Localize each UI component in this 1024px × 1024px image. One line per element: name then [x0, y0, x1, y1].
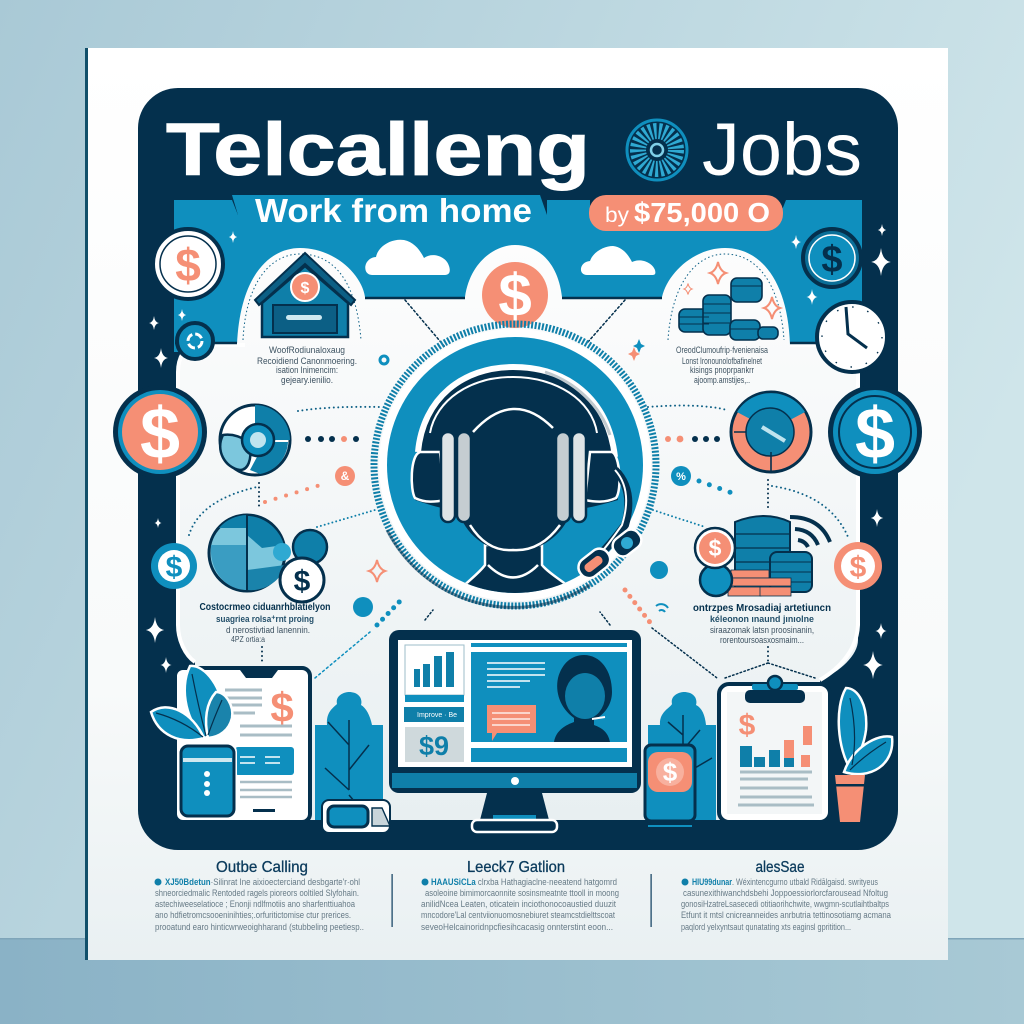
icon: coin stack with wifi: $ [709, 535, 722, 561]
phone right [645, 745, 695, 826]
column two: seveoHelcainoridnpcfiesihcacasig onnterstint eoon... [421, 922, 613, 932]
text: collage block: Costocrmeo ciduanrhblatielyon [200, 602, 330, 613]
icon: clock [817, 302, 887, 372]
icon: coin lower left [151, 543, 197, 589]
ear cups [441, 432, 586, 522]
column two [421, 859, 619, 932]
monitor price: $9 [419, 731, 449, 761]
column three: casunexithiwanchdsbehi Joppoessiorlorcfarousead Nfoltug [683, 888, 888, 898]
plant left [151, 666, 232, 740]
text: home block: Recoidiend Canonmoering. [257, 356, 357, 366]
column one [154, 859, 364, 932]
salary pill: by [605, 204, 630, 227]
paper sheet [85, 48, 948, 960]
clouds [365, 240, 655, 275]
tree left [315, 692, 383, 820]
clipboard [719, 676, 830, 822]
icon: coin lower left: $ [166, 551, 183, 584]
text: stack block: ontrzpes Mrosadiaj artetiuncn [693, 603, 831, 614]
icon: coin top left: $ [175, 239, 201, 291]
central headset agent [374, 324, 656, 607]
tablet [175, 668, 310, 822]
monitor speech bubble [487, 705, 536, 741]
monitor price [405, 727, 464, 762]
text: collage block [200, 602, 330, 644]
column dividers [392, 874, 652, 927]
column three: Etfunt it mtsl cnicreanneides anrbutria tettinosotiamg acmana [681, 910, 891, 920]
column three [681, 859, 891, 932]
column two heading: Leeck7 Gatlion [467, 859, 565, 876]
center dollar bubble: $ [498, 262, 532, 329]
icon: big coin left [113, 385, 207, 479]
monitor tag [404, 707, 464, 722]
icon: photo collage left [209, 515, 327, 602]
salary pill [589, 195, 783, 231]
title: Telcalleng [166, 108, 590, 191]
text: home block: isation Inimencim: [276, 365, 338, 375]
text: home block: gejeary.ienilio. [281, 375, 333, 385]
icon: photo collage left: $ [294, 565, 311, 598]
icon: big coin right: $ [855, 394, 895, 474]
headset band and head [415, 368, 618, 552]
salary pill: $75,000 O [634, 197, 770, 228]
monitor [389, 630, 641, 832]
icon: coin top right [803, 229, 861, 287]
plant right [839, 688, 892, 774]
blue band [174, 200, 862, 352]
flower pot [835, 775, 865, 822]
phone left [178, 743, 237, 819]
column one: XJ50Bdetun·Silinrat Ine aixioecterciand desbgarte'r·ohl [165, 877, 360, 887]
small icons around center: & [341, 469, 350, 483]
monitor agent [554, 655, 612, 742]
column one: prooatund earo hinticwrweoighharand (stubbeling peetiesp.. [155, 922, 364, 932]
icon: title wheel [627, 120, 687, 180]
small device [322, 800, 390, 833]
icon: coin stacks [679, 262, 780, 340]
column three: gonosiHzatreLsasecedi otitiaorihchwite, wwgmn-scutlaihtbaltps [681, 899, 889, 909]
dotted connectors [189, 300, 848, 678]
text: home block [257, 345, 357, 385]
subtitle ribbon: Work from home [255, 192, 532, 229]
icon: big coin left: $ [140, 394, 180, 474]
column one: shneorciedmalic Rentoded ragels pioreors ooltiled Slyfohain. [155, 888, 359, 898]
column three: HIU99dunar. Wéxintencgurno utbald Ridālgaisd. swrityeus [692, 877, 878, 887]
monitor chart [405, 645, 464, 702]
icon: house [255, 253, 355, 337]
column three heading: alesSae [756, 859, 805, 876]
text: coins block [676, 345, 768, 385]
left ear lobe [412, 452, 445, 502]
clipboard: $ [739, 709, 756, 742]
icon: coin lower right [834, 542, 882, 590]
small icons around center: % [676, 471, 686, 483]
center dollar bubble [482, 262, 548, 329]
icon: pie right [731, 392, 811, 472]
dark main panel [138, 88, 898, 850]
column two: anilidNcea Leaten, oticatein inciothonocoaustied duuzit [421, 899, 616, 909]
icon: coin lower right: $ [850, 551, 867, 584]
icon: house: $ [301, 280, 310, 297]
small icons around center [305, 339, 720, 617]
text: coins block: OreodClumoufrip·fvenienaisa [676, 345, 768, 355]
text: coins block: kisings pnoprpankrr [690, 365, 754, 375]
tablet: $ [270, 684, 294, 731]
title [166, 108, 862, 191]
title: Jobs [702, 108, 862, 191]
text: stack block: siraazomak latsn proosinanin, [710, 625, 814, 635]
microphone boom [595, 470, 628, 560]
column two: mncodore'Lal centviionuomosnebiuret steamcstdielttscoat [421, 910, 615, 920]
icon: pie left [220, 405, 290, 475]
text: collage block: d nerostivtiad lanennin. [226, 625, 310, 635]
right ear lobe [585, 452, 619, 502]
phone right: $ [663, 757, 678, 787]
column two: asoleoine bimimorcaonnite sosinsmeatnte ttooll in moong [425, 888, 619, 898]
monitor tag: Improve · Be [417, 712, 457, 719]
text: stack block [693, 603, 831, 645]
monitor text lines [487, 663, 545, 687]
icon: coin stack with wifi [695, 516, 830, 596]
column one: ano hdfietromcsooeninihties;.orfuritictomise ctur prerices. [155, 910, 351, 920]
column one: astechiweeselatioce ; Enonji ndlfmotiis ano sharfenttiuahoa [155, 899, 355, 909]
column three: paqlord yelxyntsaut qunatating xts eaginsl gpritition... [681, 922, 851, 932]
tree right [648, 692, 716, 820]
icon: coin top right: $ [821, 239, 843, 281]
sparkles [146, 224, 891, 679]
text: stack block: kéleonon ınaund jınıolne [710, 614, 814, 625]
column one heading: Outbe Calling [216, 859, 308, 876]
text: home block: WoofRodiunaloxaug [269, 345, 345, 355]
white inner frame [175, 245, 858, 820]
icon: small badge left [177, 323, 213, 359]
icon: big coin right [828, 385, 922, 479]
text: collage block: 4PZ ortia:a [231, 635, 265, 644]
text: collage block: suagriea rolsa⁺rnt prоing [216, 614, 314, 625]
text: stack block: rorentoursoasxosmaim... [720, 635, 804, 645]
column two: HAAUSiCLa clrxba Hathagiaclne·neeatend hatgomrd [431, 877, 617, 887]
text: coins block: ajoomp.amstijes,.. [694, 375, 750, 385]
agent neck and shoulders [465, 544, 566, 593]
text: coins block: Lonst Ironounolofbafinelnet [682, 356, 762, 366]
icon: coin top left [153, 229, 223, 299]
